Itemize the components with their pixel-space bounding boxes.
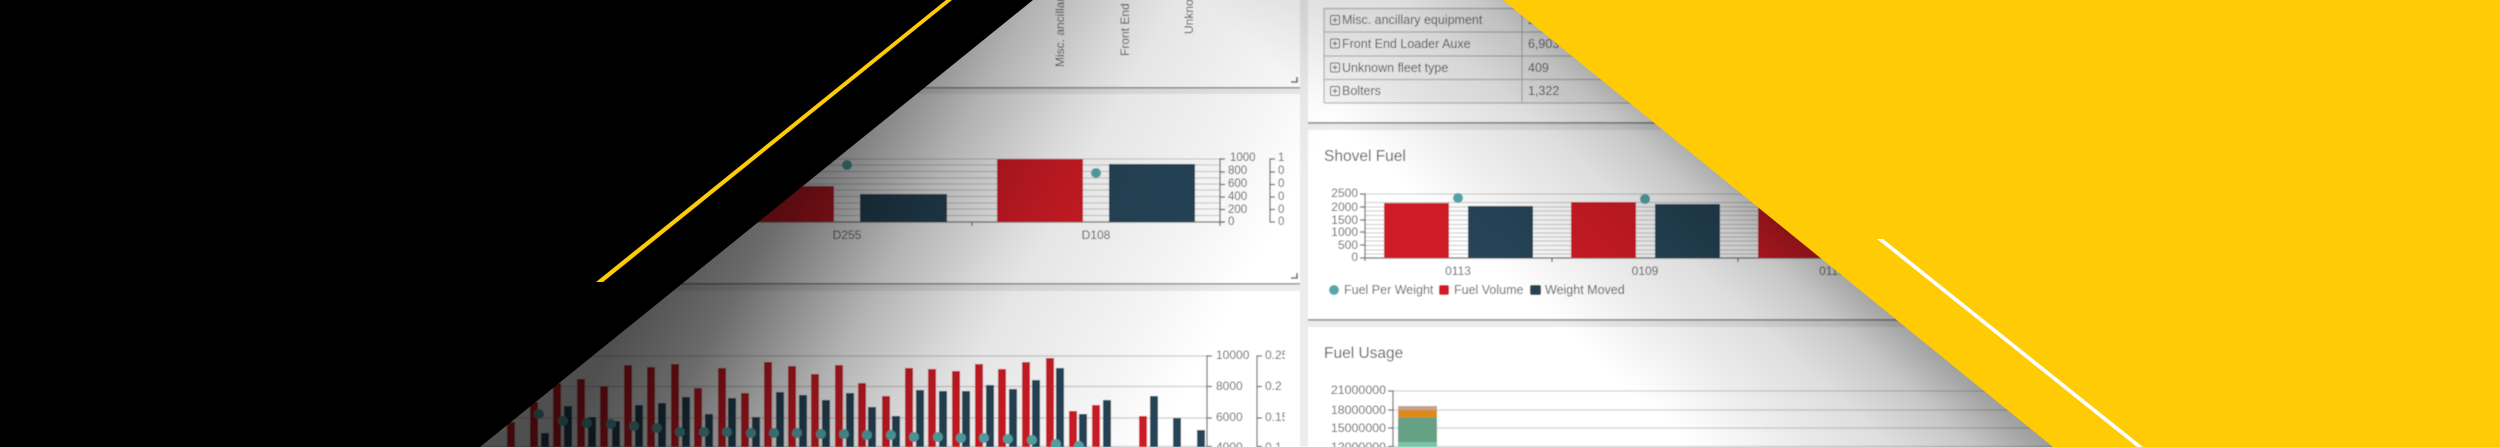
chart legend: Fuel Per Weight: [1344, 283, 1434, 297]
panel: middle left bar chart: 0: [1228, 216, 1234, 228]
stacked bar: [1398, 406, 1437, 447]
yellow accent line on black: [596, 0, 952, 282]
panel: shovel fuel chart: 2000: [1331, 200, 1358, 214]
panel: bottom left bar chart: 8000: [1216, 379, 1243, 393]
heading: Shovel Fuel: Shovel Fuel: [1324, 148, 1406, 165]
panel: fleet table: 2: [1528, 13, 1535, 27]
panel: fleet table: Misc. ancillary equipment: [1342, 13, 1483, 27]
panel: shovel fuel chart: 500: [1338, 238, 1358, 252]
panel: bottom left bar chart: 0.2: [1265, 379, 1282, 393]
panel: shovel fuel chart: 0109: [1632, 264, 1659, 278]
panel: middle left bar chart: 600: [1228, 178, 1247, 190]
panel: middle left bar chart: 0: [1278, 178, 1284, 190]
panel: fleet table: Unknown fleet type: [1342, 61, 1448, 75]
yellow diagonal shape: [1503, 0, 2500, 447]
panel: fuel usage chart: 15000000: [1331, 421, 1386, 435]
panel: middle left bar chart: 1: [1278, 152, 1284, 164]
panel: bottom left bar chart: [506, 291, 1300, 447]
panel: shovel fuel chart: 0: [1351, 250, 1358, 264]
panel: middle left bar chart: 200: [1228, 204, 1247, 216]
weight moved bars: [541, 368, 1205, 447]
panel: middle left bar chart: 0: [1278, 165, 1284, 177]
panel: bottom left bar chart: 10000: [1216, 348, 1250, 362]
panel: top left chart with rotated labels: [0, 0, 1300, 89]
panel: middle left bar chart: D108: [1082, 228, 1111, 242]
panel: middle left bar chart: 0: [1278, 191, 1284, 203]
white accent line on yellow: [1877, 239, 2143, 447]
panel: bottom left bar chart: 0.25: [1265, 348, 1289, 362]
panel: shovel fuel chart: 1500: [1331, 213, 1358, 227]
panel: fleet table: 409: [1528, 61, 1549, 75]
fuel per weight dots: [534, 409, 1084, 447]
panel: fleet table: Bolters: [1342, 84, 1381, 98]
panel: fleet table: [1308, 0, 2500, 124]
panel: fuel usage chart: 18000000: [1331, 403, 1386, 417]
panel: fleet table: 1,322: [1528, 84, 1559, 98]
panel: fleet table: Front End Loader Auxe: [1342, 37, 1471, 51]
panel: middle left bar chart: D255: [833, 228, 862, 242]
panel: shovel fuel chart: [1308, 130, 2500, 321]
panel: shovel fuel chart: 0113: [1445, 264, 1471, 278]
panel: bottom left bar chart: 0.15: [1265, 410, 1289, 424]
panel: fleet table: 6,903: [1528, 37, 1559, 51]
panel: shovel fuel chart: 1000: [1331, 225, 1358, 239]
chart legend: Fuel Volume: [1454, 283, 1524, 297]
panel: middle left bar chart: 0: [1278, 204, 1284, 216]
panel: fuel usage chart: [1308, 327, 2500, 447]
panel: middle left bar chart: 0: [1278, 216, 1284, 228]
chart legend: [1329, 283, 1625, 297]
panel: bottom left bar chart: 6000: [1216, 410, 1243, 424]
panel: middle left bar chart: 800: [1228, 165, 1247, 177]
fuel volume bars: [507, 358, 1147, 447]
black diagonal shape: [0, 0, 1033, 447]
panel: fuel usage chart: 21000000: [1331, 383, 1386, 397]
chart legend: Weight Moved: [1545, 283, 1625, 297]
heading: Fuel Usage: Fuel Usage: [1324, 345, 1403, 362]
panel: shovel fuel chart: 2500: [1331, 186, 1358, 200]
panel: middle left bar chart: [0, 94, 1300, 285]
panel: shovel fuel chart: 0110: [1819, 264, 1845, 278]
dashboard screenshot background: [481, 0, 2052, 447]
panel: middle left bar chart: 1000: [1230, 152, 1256, 164]
panel: middle left bar chart: 400: [1228, 191, 1247, 203]
